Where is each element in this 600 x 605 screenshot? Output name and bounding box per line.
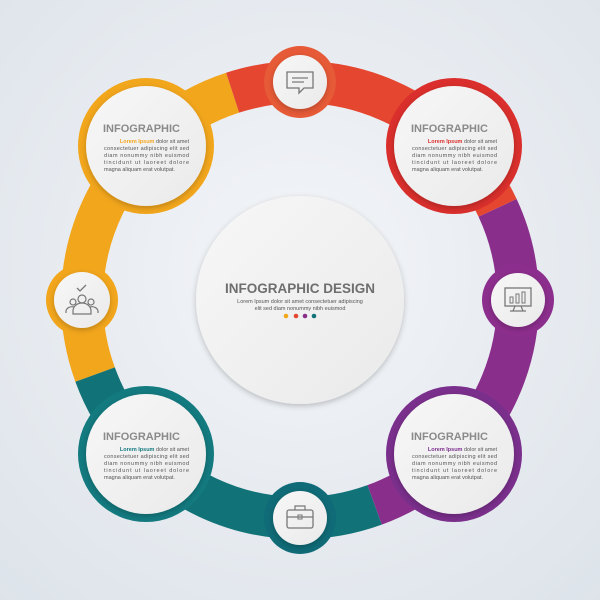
center circle <box>196 196 404 404</box>
big circle: top-left: magna aliquam erat volutpat. <box>104 167 175 173</box>
big circle: top-right: INFOGRAPHIC <box>411 123 488 135</box>
big circle: top-left: INFOGRAPHIC <box>103 123 180 135</box>
big circle: bottom-left: INFOGRAPHIC <box>103 431 180 443</box>
big circle: top-left: consectetuer adipiscing elit sed <box>104 146 189 152</box>
big circle: bottom-left: tincidunt ut laoreet dolore <box>104 468 189 474</box>
center title: INFOGRAPHIC DESIGN <box>225 281 375 296</box>
big circle: bottom-right: magna aliquam erat volutpat. <box>412 475 483 481</box>
icon: monitor chart <box>491 273 545 327</box>
big circle: top-right: diam nonummy nibh euismod <box>412 153 497 159</box>
big circle: top-right: Lorem Ipsum dolor sit amet <box>428 139 497 145</box>
segment: purple <box>375 208 518 505</box>
segment: teal <box>95 375 375 518</box>
big circle: bottom-left: diam nonummy nibh euismod <box>104 461 189 467</box>
big circle: bottom-right: tincidunt ut laoreet dolore <box>412 468 497 474</box>
big circle: bottom-left: consectetuer adipiscing elit sed <box>104 454 189 460</box>
big circle: top-right: consectetuer adipiscing elit sed <box>412 146 497 152</box>
segment: yellow <box>82 93 233 375</box>
segment: red <box>233 82 498 208</box>
big circle: top-left <box>86 86 206 206</box>
big circle: bottom-left <box>86 394 206 514</box>
icon: chat bubble <box>273 55 327 109</box>
big circle: top-right <box>394 86 514 206</box>
center circle: elit sed diam nonummy nibh euismod <box>255 306 345 312</box>
big circle: top-right: magna aliquam erat volutpat. <box>412 167 483 173</box>
dots <box>284 314 316 318</box>
big circle: bottom-right <box>394 394 514 514</box>
ring: colored segments <box>82 82 518 518</box>
big circle: top-left: Lorem Ipsum dolor sit amet <box>120 139 189 145</box>
big circle: top-right: tincidunt ut laoreet dolore <box>412 160 497 166</box>
big circle: bottom-right: consectetuer adipiscing elit sed <box>412 454 497 460</box>
big circle: bottom-right: INFOGRAPHIC <box>411 431 488 443</box>
bumps <box>46 46 554 554</box>
big circle: bottom-left: Lorem Ipsum dolor sit amet <box>120 447 189 453</box>
big circle: bottom-right: Lorem Ipsum dolor sit amet <box>428 447 497 453</box>
big circle: bottom-left: magna aliquam erat volutpat. <box>104 475 175 481</box>
center text: Lorem Ipsum dolor sit amet consectetuer adipiscing <box>237 299 363 305</box>
big circle: bottom-right: diam nonummy nibh euismod <box>412 461 497 467</box>
big circle: top-left: tincidunt ut laoreet dolore <box>104 160 189 166</box>
icon: team <box>54 272 110 328</box>
big circle: top-left: diam nonummy nibh euismod <box>104 153 189 159</box>
icon: briefcase <box>273 491 327 545</box>
